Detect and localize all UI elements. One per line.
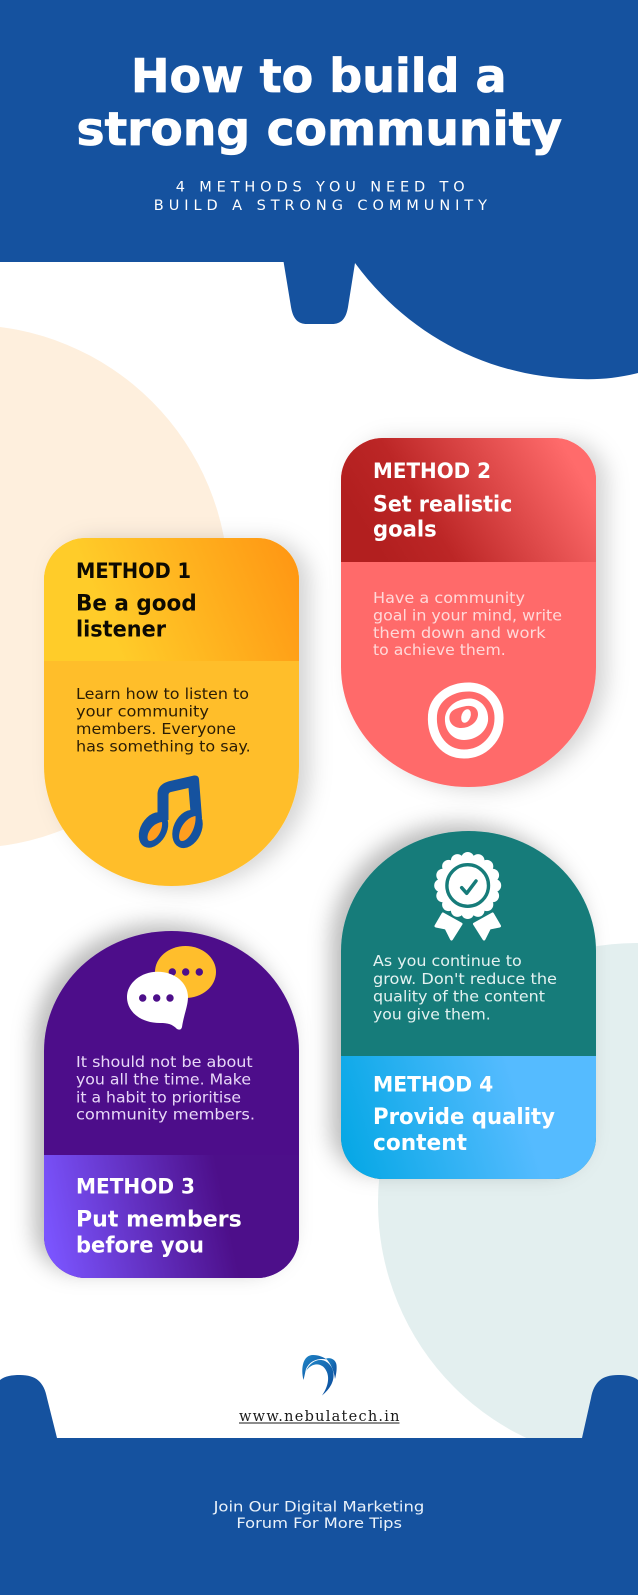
- call to action text: Join Our Digital Marketing: [212, 1500, 424, 1516]
- header panel: [0, 0, 638, 379]
- method title: before you: [76, 1234, 204, 1258]
- subtitle: [154, 180, 487, 214]
- card body: [44, 931, 299, 1278]
- card heading band: [341, 1056, 596, 1179]
- method title: Set realistic: [373, 493, 512, 518]
- card body: [341, 831, 596, 1179]
- panel: method 2: [341, 438, 596, 787]
- background circle: peach: [0, 325, 229, 848]
- icon: target swirl: [432, 687, 499, 754]
- method description: members. Everyone: [76, 720, 236, 738]
- method description: to achieve them.: [373, 641, 506, 659]
- method description: your community: [76, 702, 209, 720]
- title: [76, 49, 562, 156]
- card heading band: [341, 438, 596, 562]
- method title: [373, 1105, 555, 1156]
- website link: www.nebulatech.in: [239, 1409, 400, 1425]
- header blue shape: [0, 0, 638, 379]
- title: strong community: [76, 102, 562, 156]
- footer blue shape: [0, 1375, 638, 1595]
- icon: logo: [302, 1355, 337, 1396]
- method description: [373, 589, 562, 659]
- method description: has something to say.: [76, 738, 251, 756]
- method description: goal in your mind, write: [373, 606, 562, 624]
- method description: them down and work: [373, 624, 546, 642]
- panel: method 3: [44, 931, 299, 1278]
- method title: Put members: [76, 1208, 242, 1232]
- method label: METHOD 1: [76, 559, 191, 583]
- method description: quality of the content: [373, 987, 545, 1005]
- panel: method 1: [44, 538, 299, 886]
- method description: it a habit to prioritise: [76, 1088, 241, 1106]
- card body: [341, 438, 596, 787]
- method label: METHOD 2: [373, 459, 491, 483]
- method title: listener: [76, 618, 166, 643]
- method title: Be a good: [76, 592, 197, 617]
- method description: It should not be about: [76, 1053, 253, 1071]
- method title: [76, 592, 197, 643]
- method label: METHOD 3: [76, 1175, 195, 1199]
- icon: award badge: [434, 852, 501, 939]
- card heading band: [44, 538, 299, 661]
- title: How to build a: [131, 49, 506, 103]
- icon: chat bubbles: [127, 946, 216, 1030]
- method description: grow. Don't reduce the: [373, 970, 557, 988]
- method title: [76, 1208, 242, 1258]
- card heading band: [44, 1155, 299, 1278]
- method description: As you continue to: [373, 952, 522, 970]
- method description: you give them.: [373, 1005, 491, 1023]
- method title: Provide quality: [373, 1105, 555, 1130]
- method description: [373, 952, 557, 1023]
- method title: content: [373, 1131, 467, 1156]
- icon: music notes: [133, 775, 209, 853]
- method description: [76, 1053, 255, 1124]
- panel: method 4: [341, 831, 596, 1179]
- method description: [76, 685, 251, 756]
- method description: Have a community: [373, 589, 525, 607]
- method title: goals: [373, 518, 437, 543]
- method description: Learn how to listen to: [76, 685, 249, 703]
- subtitle: BUILD A STRONG COMMUNITY: [154, 198, 487, 214]
- method label: METHOD 4: [373, 1072, 493, 1096]
- method description: you all the time. Make: [76, 1071, 251, 1089]
- card body: [44, 538, 299, 886]
- call to action text: [212, 1500, 424, 1532]
- method title: [373, 493, 512, 543]
- call to action text: Forum For More Tips: [236, 1516, 402, 1532]
- subtitle: 4 METHODS YOU NEED TO: [176, 180, 465, 196]
- method description: community members.: [76, 1106, 255, 1124]
- background circle: pale teal: [378, 943, 638, 1463]
- footer panel: [0, 1375, 638, 1595]
